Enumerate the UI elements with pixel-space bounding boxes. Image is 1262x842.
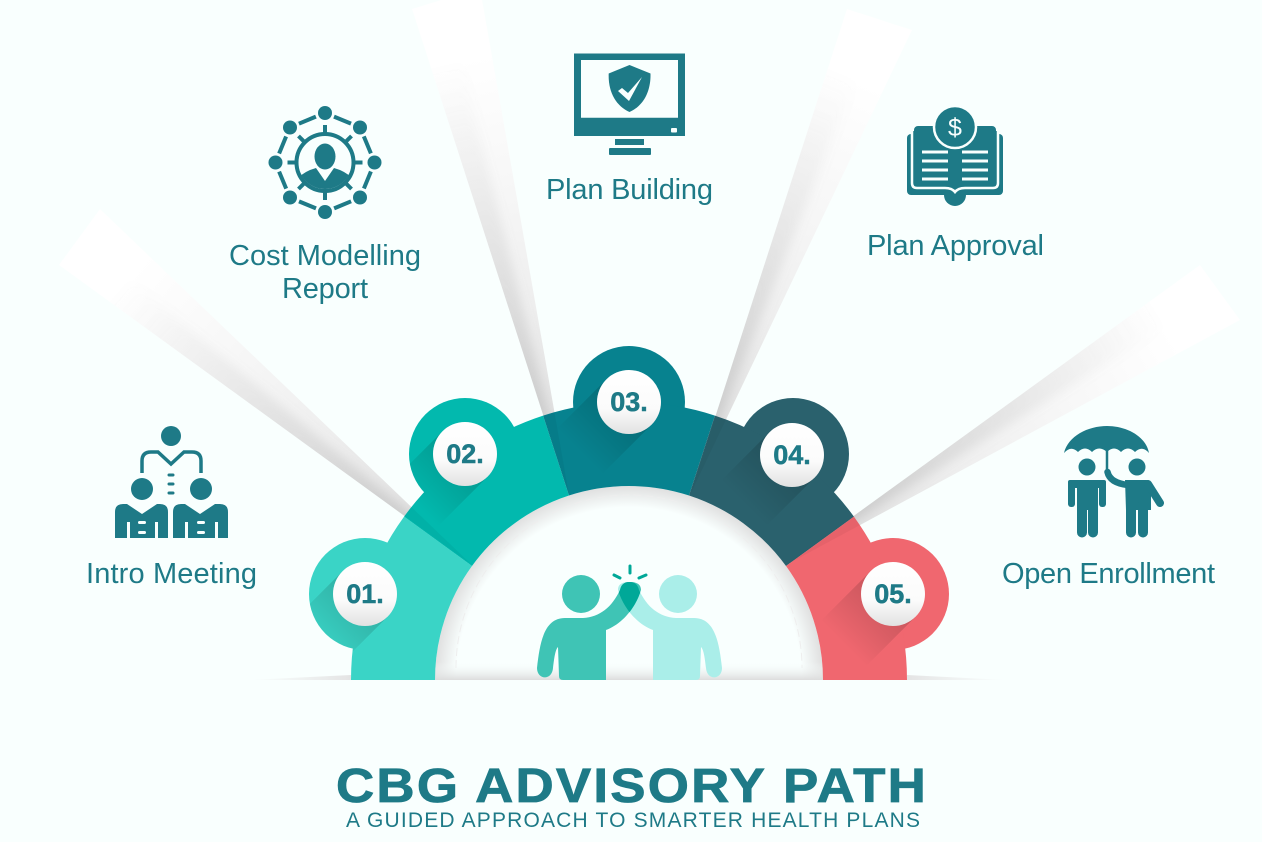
number disc 03: 03. <box>610 387 648 417</box>
label: Cost Modelling Report: Report <box>282 273 368 305</box>
number disc 01 <box>333 562 397 626</box>
segment 03 <box>543 346 715 496</box>
label: Plan Approval: Plan Approval <box>867 230 1044 262</box>
segment 01 <box>309 517 472 680</box>
title: CBG ADVISORY PATH <box>336 760 928 813</box>
label: Plan Building: Plan Building <box>546 174 713 206</box>
label: Cost Modelling Report <box>229 240 421 305</box>
segment 04 <box>689 398 854 566</box>
long shadows behind number discs <box>292 379 916 667</box>
light beam: step 2 <box>448 110 554 416</box>
light beam: step 1 <box>151 318 412 516</box>
label: Intro Meeting: Intro Meeting <box>86 558 257 590</box>
inner semicircle stage <box>435 486 823 680</box>
number disc 03 <box>597 370 661 434</box>
segment 02 <box>404 398 569 566</box>
ground shadow line <box>250 675 1006 680</box>
number disc 04 <box>760 423 824 487</box>
number disc 05 <box>861 562 925 626</box>
icon: intro meeting org chart <box>115 426 228 538</box>
number disc 04: 04. <box>773 440 811 470</box>
icon: book with dollar coin <box>907 106 1003 206</box>
label: Cost Modelling Report: Cost Modelling <box>229 240 421 272</box>
segment 05 <box>786 517 949 680</box>
number disc 05: 05. <box>874 579 912 609</box>
icon: high five <box>537 566 722 680</box>
number disc 02: 02. <box>446 439 484 469</box>
icon: monitor with shield <box>574 54 685 155</box>
number disc 01: 01. <box>346 579 384 609</box>
subtitle: A GUIDED APPROACH TO SMARTER HEALTH PLANS <box>346 809 920 832</box>
label: Open Enrollment: Open Enrollment <box>1002 558 1215 590</box>
icon: cost modelling network <box>268 106 382 219</box>
icon: book with dollar coin: $ <box>948 114 962 142</box>
icon: umbrella protecting two people <box>1064 426 1160 538</box>
light beam: step 4 <box>793 335 1114 561</box>
light beam: step 3 <box>716 122 831 420</box>
number disc 02 <box>433 422 497 486</box>
